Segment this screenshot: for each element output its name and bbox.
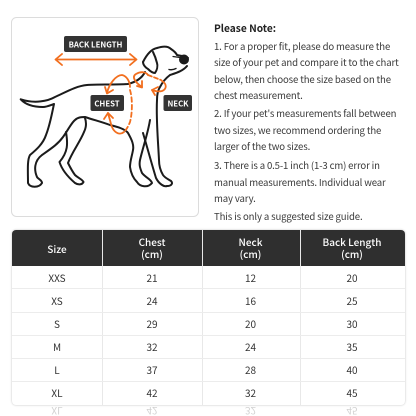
icon: dog nose bbox=[179, 54, 189, 64]
header text: chest: (cm) bbox=[141, 246, 163, 261]
row: XS: 24 bbox=[146, 293, 158, 308]
arrow: chest measurement bbox=[104, 75, 132, 134]
row: L: 37 bbox=[146, 362, 158, 377]
text block: note 3: 3. There is a 0.5-1 inch (1-3 cm) error in bbox=[214, 158, 380, 172]
icon: dog outline bbox=[21, 47, 188, 187]
row: M: 32 bbox=[146, 339, 158, 354]
row: M: 24 bbox=[245, 339, 256, 354]
row: XS bbox=[51, 293, 358, 308]
row: S: 29 bbox=[146, 316, 158, 331]
table header bbox=[12, 230, 404, 266]
row: XS: 16 bbox=[245, 293, 256, 308]
row: S: 20 bbox=[245, 316, 256, 331]
row: XL: XL bbox=[51, 385, 63, 400]
heading: please note: Please Note: bbox=[214, 20, 276, 35]
row: L: 40 bbox=[346, 362, 358, 377]
text block: note 3: may vary. bbox=[214, 191, 256, 205]
label: neck bbox=[164, 95, 192, 111]
label: chest: CHEST bbox=[94, 98, 120, 110]
label: neck: NECK bbox=[167, 98, 189, 110]
label: back length bbox=[64, 36, 127, 52]
row: L: 28 bbox=[245, 362, 256, 377]
row: XL bbox=[51, 385, 358, 400]
table reflection bbox=[51, 406, 358, 416]
arrow: back length bbox=[56, 54, 136, 65]
header text: neck bbox=[239, 234, 262, 261]
arrow: neck measurement bbox=[134, 72, 166, 95]
row: XXS bbox=[48, 270, 358, 285]
row: XXS: 20 bbox=[346, 270, 358, 285]
header text: neck: (cm) bbox=[240, 246, 261, 261]
text block: note 2: two sizes, we recommend ordering the bbox=[214, 123, 381, 137]
row: XXS: 12 bbox=[245, 270, 256, 285]
row: M bbox=[53, 339, 358, 354]
row: XL: 32 bbox=[245, 385, 256, 400]
row: S bbox=[54, 316, 358, 331]
row: L bbox=[54, 362, 358, 377]
row: XL: 42 bbox=[146, 385, 158, 400]
row: M: 35 bbox=[346, 339, 358, 354]
text block: note 1: below, then choose the size based on the bbox=[214, 72, 391, 86]
row: XL: 45 bbox=[346, 385, 358, 400]
row: L: L bbox=[54, 362, 60, 377]
row: XXS: XXS bbox=[48, 270, 66, 285]
header text: chest bbox=[139, 234, 166, 261]
text block: note 2: 2. If your pet's measurements fall between bbox=[214, 106, 396, 120]
table: size chart bbox=[12, 230, 404, 404]
text block: note 1: 1. For a proper fit, please do measure the bbox=[214, 38, 390, 52]
header text: neck: Neck bbox=[239, 234, 262, 249]
row: S: S bbox=[54, 316, 60, 331]
text block: disclaimer: This is only a suggested size guide. bbox=[214, 209, 362, 223]
label: back length: BACK LENGTH bbox=[69, 39, 122, 50]
row: M: M bbox=[53, 339, 61, 354]
row: XS: 25 bbox=[346, 293, 358, 308]
header text: chest: Chest bbox=[139, 234, 165, 249]
text block: note 1 bbox=[214, 38, 399, 102]
row: XXS: 21 bbox=[146, 270, 158, 285]
text block: note 1: chest measurement. bbox=[214, 88, 303, 102]
header text: back length: (cm) bbox=[341, 246, 363, 261]
header text: size: Size bbox=[47, 240, 67, 256]
text block: note 3: manual measurements. Individual wear bbox=[214, 175, 386, 189]
text block: note 2: larger of the two sizes. bbox=[214, 139, 310, 153]
header text: back length: Back Length bbox=[323, 234, 381, 249]
label: chest bbox=[90, 95, 124, 111]
panel: dog measuring diagram bbox=[11, 17, 199, 217]
text block: note 2 bbox=[214, 106, 396, 153]
text block: note 1: size of your pet and compare it to the chart bbox=[214, 55, 399, 69]
row: S: 30 bbox=[346, 316, 358, 331]
row: XS: XS bbox=[51, 293, 63, 308]
text block: note 3 bbox=[214, 158, 386, 205]
header text: back length bbox=[323, 234, 381, 261]
